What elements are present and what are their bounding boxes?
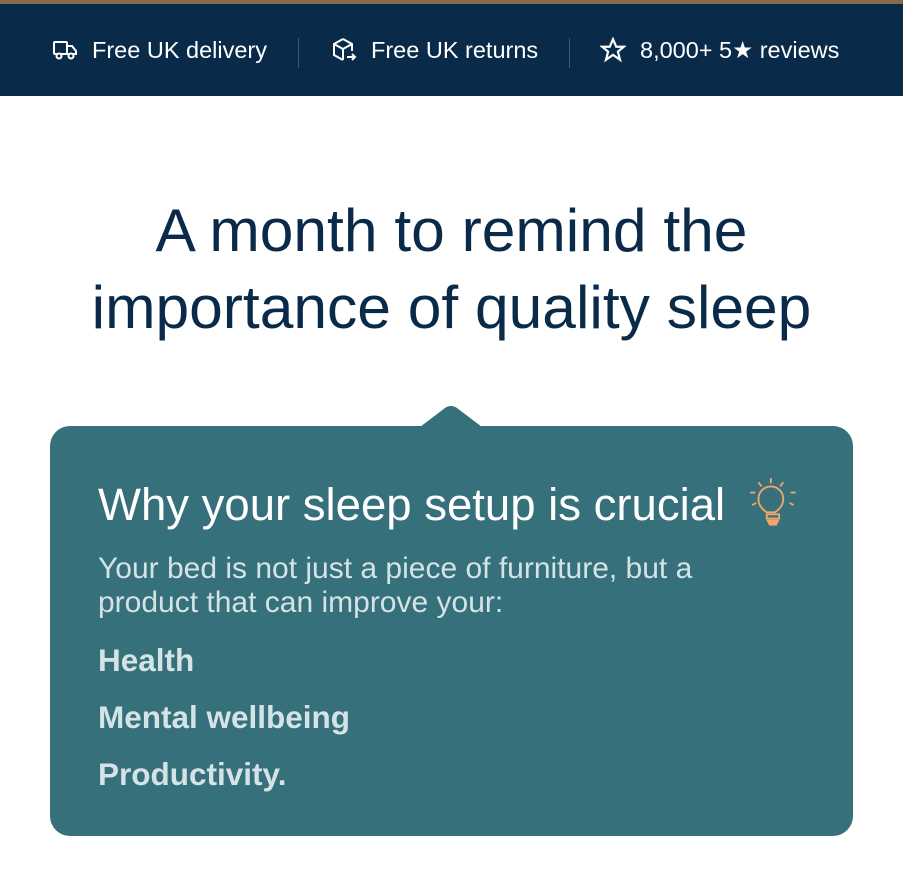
list: productivity: Productivity. bbox=[98, 756, 286, 792]
list: mental wellbeing: Mental wellbeing bbox=[98, 699, 350, 735]
icon: box bbox=[333, 38, 356, 61]
banner bbox=[0, 4, 903, 96]
list: health: Health bbox=[98, 642, 194, 678]
heading: Why your sleep setup is crucial bbox=[98, 479, 725, 530]
icon: lightbulb bbox=[750, 478, 796, 526]
top image strip bbox=[0, 0, 903, 4]
title: importance of quality sleep bbox=[92, 273, 811, 341]
returns item: Free UK returns bbox=[371, 36, 538, 62]
body text: Your bed is not just a piece of furniture, but a product that can improve your: bbox=[98, 552, 692, 619]
title: A month to remind the bbox=[156, 196, 747, 264]
panel bbox=[50, 426, 853, 836]
title bbox=[92, 196, 811, 341]
delivery item: Free UK delivery bbox=[92, 36, 267, 62]
icon: truck bbox=[53, 41, 77, 60]
icon: star bbox=[600, 37, 626, 62]
notch bbox=[421, 406, 481, 426]
reviews item: 8,000+ 5★ reviews bbox=[640, 37, 839, 63]
